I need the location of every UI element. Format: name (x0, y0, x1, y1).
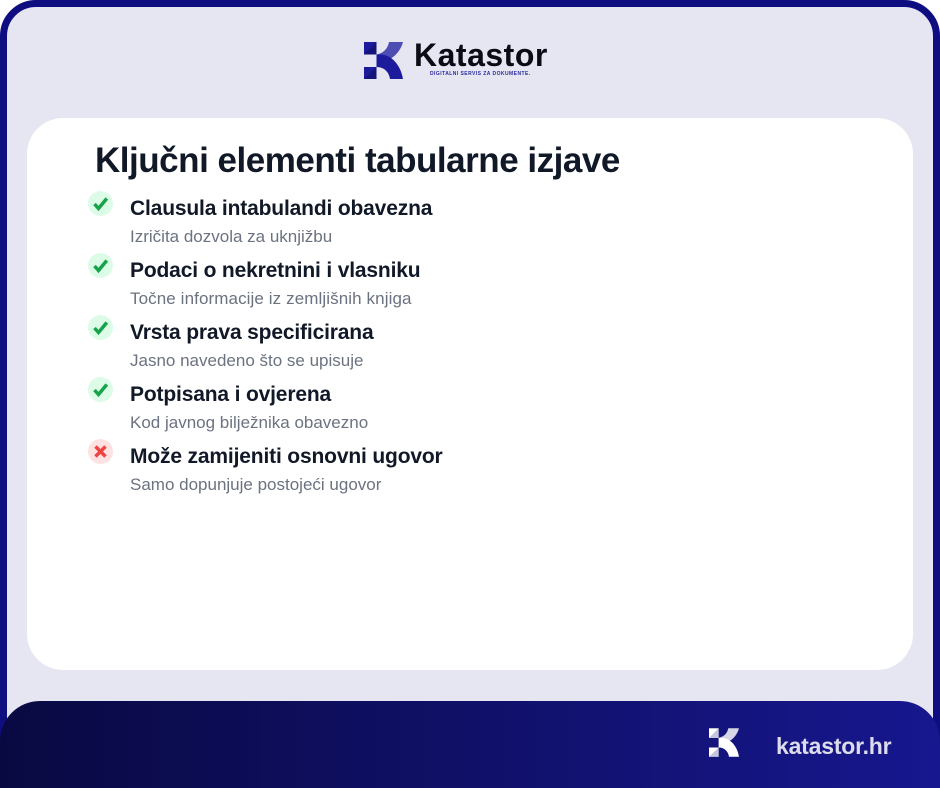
checklist item 4 (88, 377, 368, 432)
icon: check (88, 377, 113, 402)
item heading: Podaci o nekretnini i vlasniku (130, 259, 420, 282)
footer bar (0, 701, 940, 788)
checklist item 3 (88, 315, 374, 370)
item heading: Može zamijeniti osnovni ugovor (130, 445, 443, 468)
tagline: DIGITALNI SERVIS ZA DOKUMENTE. (430, 71, 531, 77)
title: Ključni elementi tabularne izjave (95, 141, 620, 180)
icon: check (88, 315, 113, 340)
logo (364, 37, 548, 79)
checklist item 5 (88, 439, 443, 494)
checklist item 1 (88, 191, 433, 246)
icon: check (88, 191, 113, 216)
wordmark: Katastor (414, 37, 548, 73)
icon: footer K mark (709, 728, 739, 757)
footer url: katastor.hr (776, 733, 891, 759)
item description: Jasno navedeno što se upisuje (130, 351, 363, 370)
item description: Samo dopunjuje postojeći ugovor (130, 475, 381, 494)
item description: Kod javnog bilježnika obavezno (130, 413, 368, 432)
item description: Izričita dozvola za uknjižbu (130, 227, 332, 246)
item description: Točne informacije iz zemljišnih knjiga (130, 289, 412, 308)
item heading: Clausula intabulandi obavezna (130, 197, 432, 220)
icon: Katastor K mark (364, 42, 403, 79)
item heading: Potpisana i ovjerena (130, 383, 331, 406)
icon: check (88, 253, 113, 278)
icon: cross (88, 439, 113, 464)
checklist item 2 (88, 253, 420, 308)
item heading: Vrsta prava specificirana (130, 321, 373, 344)
panel: key elements (27, 118, 913, 670)
